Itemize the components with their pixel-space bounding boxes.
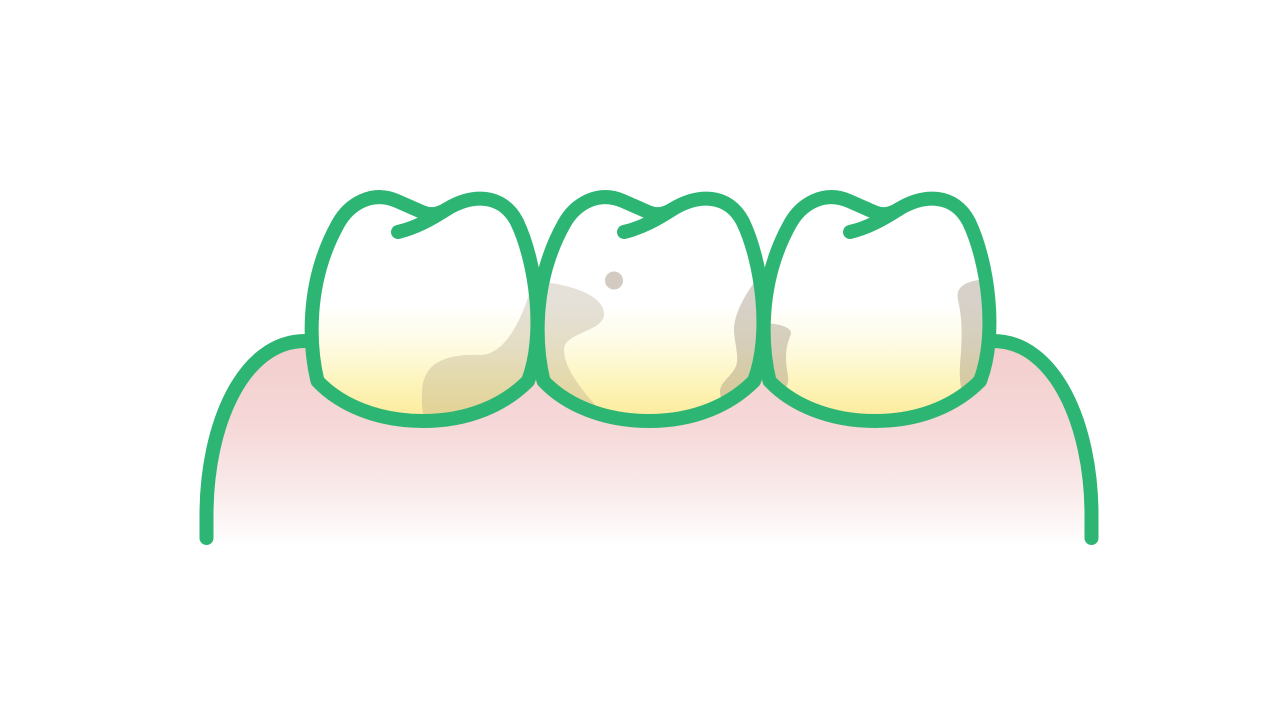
tooth 3 outline [764,197,989,421]
illustration: three stained teeth in gum [200,190,1098,545]
tooth 2 outline [538,197,763,421]
stain: tooth 2 right [720,284,756,397]
gum [206,341,1092,546]
tooth 1 enamel [312,197,537,421]
tooth 1 outline [312,197,537,421]
stain: tooth 2 upper left [544,282,604,406]
tooth 2 enamel [538,197,763,421]
stain: tooth 3 left [770,324,791,387]
stain: tooth 3 right [958,280,982,388]
tooth 3 enamel [764,197,989,421]
stain: tooth 1 lower right [422,295,530,414]
stain: dot on tooth 2 [605,272,623,290]
